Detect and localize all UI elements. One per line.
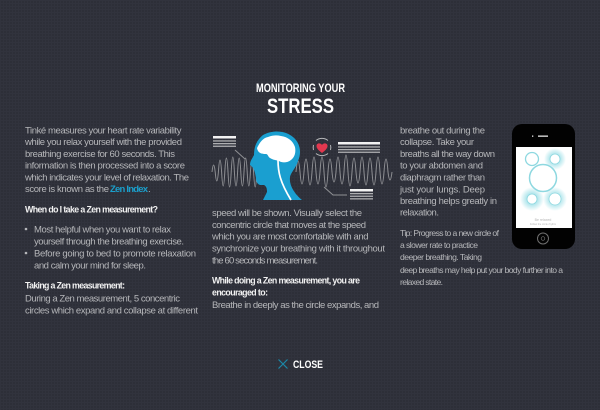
paragraph: breathing: just your lungs. Deep (399, 184, 485, 196)
intro paragraph: information is then processed into a score (25, 160, 185, 172)
paragraph: breathing: relaxation. (400, 208, 439, 218)
intro paragraph: score is known as the (25, 184, 109, 195)
icon: head silhouette (250, 131, 302, 200)
paragraph: tip: deep breaths may help put your body further into a (400, 265, 563, 275)
paragraph: breathing: breathe out during the (400, 126, 485, 136)
paragraph: during measurement: circles which expand and collapse at different (25, 306, 198, 316)
bullet list: and calm your mind for sleep. (34, 260, 146, 272)
phone home button (538, 233, 548, 244)
heading: while measuring (212, 276, 360, 298)
close button (278, 359, 323, 371)
paragraph: breathing: breathing helps greatly in (400, 196, 497, 207)
icon: heart in ring (313, 138, 331, 156)
intro paragraph: Zen Index (110, 184, 149, 195)
paragraph: breathing: diaphragm rather than (400, 172, 485, 184)
paragraph: tip: a slower rate to practice (400, 240, 478, 250)
paragraph: tip (400, 228, 563, 287)
paragraph: breathing (399, 126, 497, 218)
screen caption: Follow the circle rhythm (530, 223, 556, 226)
paragraph: breathe in: Breathe in deeply as the circle expands, and (212, 300, 379, 311)
paragraph: during measurement (25, 294, 198, 316)
paragraph: concentric circle: synchronize your breathing with it throughout (212, 244, 385, 254)
paragraph: tip: Tip: Progress to a new circle of (400, 228, 500, 238)
paragraph: concentric circle: which you are most comfortable with and (211, 232, 368, 242)
callout: lower label (324, 187, 373, 200)
paragraph: concentric circle: speed will be shown. Visually select the (212, 208, 362, 219)
icon: spinal cord (278, 160, 291, 200)
icon: brain (257, 135, 295, 162)
screen caption: Be relaxed (535, 218, 551, 222)
phone mockup (512, 124, 575, 249)
title (256, 83, 346, 118)
phone speaker (532, 136, 548, 137)
callout: right label (338, 142, 380, 153)
paragraph: breathing: collapse. Take your (400, 137, 474, 148)
intro paragraph: . (148, 184, 151, 195)
paragraph: breathing: breaths all the way down (400, 149, 495, 160)
intro paragraph (24, 126, 189, 195)
panel: right text column (399, 126, 563, 287)
intro paragraph: Tinké measures your heart rate variability (25, 126, 182, 136)
bullet list: Most helpful when you want to relax (34, 224, 171, 236)
brain wave line (212, 155, 392, 187)
bullet list (25, 224, 196, 272)
paragraph: breathing: to your abdomen and (400, 160, 483, 172)
phone screen (516, 147, 572, 228)
paragraph: concentric circle: the 60 seconds measurement. (212, 256, 318, 266)
bullet list: Before going to bed to promote relaxation (34, 248, 196, 260)
heading: taking a measurement: Taking a Zen measurement: (25, 280, 125, 290)
breathing circles (520, 148, 567, 211)
callout: upper left label (213, 136, 245, 159)
paragraph: tip: relaxed state. (400, 277, 443, 287)
bullet list: yourself through the breathing exercise. (34, 236, 184, 248)
heading: while measuring: While doing a Zen measurement, you are (212, 276, 360, 286)
paragraph: tip: deeper breathing. Taking (400, 252, 482, 262)
title: STRESS (267, 95, 334, 118)
paragraph: during measurement: During a Zen measurement, 5 concentric (25, 294, 180, 304)
intro paragraph: breathing exercise for 60 seconds. This (25, 149, 175, 160)
panel: left text column (24, 126, 198, 316)
close label: CLOSE (293, 359, 323, 371)
heading: when to measure: When do I take a Zen measurement? (25, 204, 158, 214)
panel: middle text column (211, 208, 385, 311)
intro paragraph: which indicates your level of relaxation. The (24, 172, 189, 184)
screen caption (530, 218, 556, 226)
intro paragraph: while you relax yourself with the provided (24, 137, 182, 148)
title: MONITORING YOUR (256, 83, 346, 95)
paragraph: concentric circle: concentric circle that moves at the speed (212, 220, 366, 231)
heading: while measuring: encouraged to: (212, 288, 268, 298)
paragraph: concentric circle (211, 208, 385, 266)
icon: close x (278, 360, 288, 368)
illustration: head, brain, heart and waves (212, 131, 392, 200)
